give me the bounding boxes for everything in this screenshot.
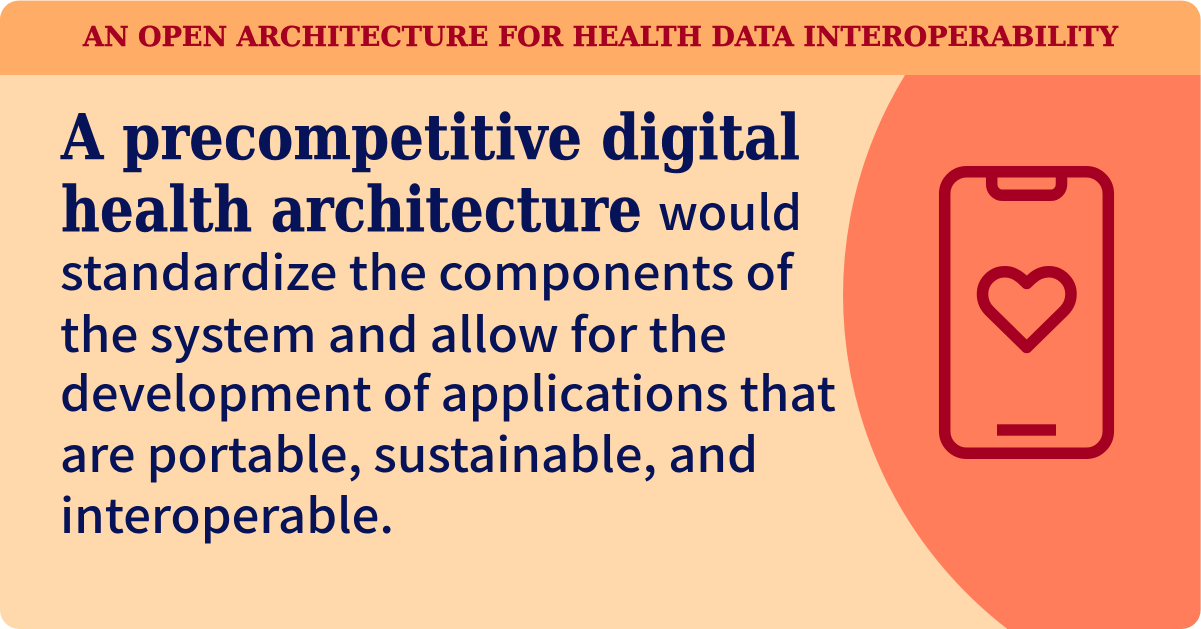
text block: main statement: development of applications that xyxy=(60,356,836,425)
text block: main statement: the system and allow for the xyxy=(60,297,727,366)
heading: header title: AN OPEN ARCHITECTURE FOR HEALTH DATA INTEROPERABILITY xyxy=(82,22,1119,53)
decorative circle panel xyxy=(843,75,1201,629)
text block: main statement: interoperable. xyxy=(60,478,394,547)
text block: main statement xyxy=(60,100,836,547)
phone body xyxy=(945,172,1108,453)
text block: main statement: health architecture xyxy=(61,172,642,246)
heart xyxy=(982,272,1071,348)
phone home bar xyxy=(997,424,1056,436)
icon: phone with heart xyxy=(945,172,1108,453)
header band xyxy=(0,0,1201,75)
text block: main statement: standardize the components of xyxy=(60,235,795,304)
text block: main statement: would xyxy=(658,175,802,244)
text block: main statement: A precompetitive digital xyxy=(60,100,800,174)
text block: main statement: are portable, sustainable, and xyxy=(60,417,758,486)
phone notch xyxy=(992,172,1062,195)
